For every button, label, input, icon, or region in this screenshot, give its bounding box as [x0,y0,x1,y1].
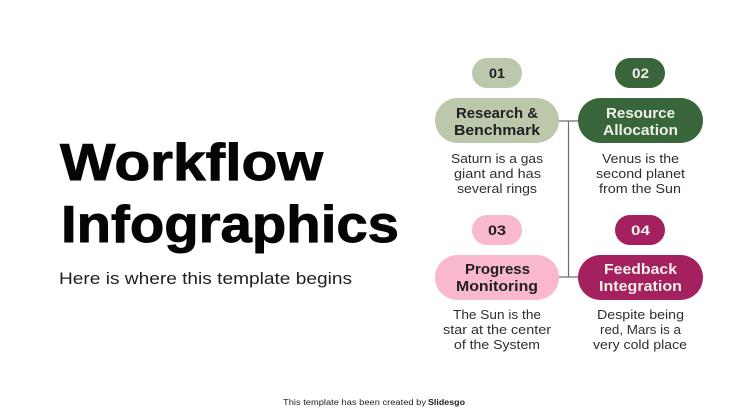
description 02: from the Sun [599,181,681,196]
description 04: red, Mars is a [600,322,682,337]
footer credit [283,398,465,407]
label pill 01: Benchmark [454,122,541,139]
step 04: feedback integration [578,215,703,352]
footer credit: Slidesgo [428,398,465,407]
description 03: The Sun is the [453,307,541,322]
description 03 [443,307,552,352]
description 01: Saturn is a gas [451,151,544,166]
step 01: research and benchmark [435,58,559,196]
subtitle: Here is where this template begins [59,269,352,288]
label pill 03 [435,255,559,300]
label pill 03: Monitoring [456,278,538,295]
step 03: progress monitoring [435,215,559,352]
label pill 03: Progress [465,261,530,278]
description 01: giant and has [454,166,542,181]
footer credit: This template has been created by [283,398,426,407]
connector lines [559,121,578,277]
number badge 04: 04 [631,222,650,238]
description 04: Despite being [597,307,684,322]
description 02: second planet [596,166,685,181]
description 04: very cold place [593,337,687,352]
label pill 02 [578,98,703,143]
step 02: resource allocation [578,58,703,196]
title: Workflow [60,134,324,192]
number badge 03: 03 [488,222,506,238]
description 01: several rings [457,181,538,196]
label pill 04: Integration [599,278,682,295]
label pill 02: Allocation [603,122,678,139]
label pill 01: Research & [456,105,538,122]
title [60,134,399,254]
description 04 [593,307,687,352]
number badge 01: 01 [489,65,505,81]
label pill 04 [578,255,703,300]
label pill 02: Resource [606,105,675,122]
description 02 [596,151,685,196]
description 03: of the System [454,337,540,352]
title: Infographics [61,196,399,254]
description 03: star at the center [443,322,552,337]
label pill 04: Feedback [604,261,678,278]
description 01 [451,151,544,196]
description 02: Venus is the [602,151,679,166]
label pill 01 [435,98,559,143]
number badge 02: 02 [632,65,649,81]
